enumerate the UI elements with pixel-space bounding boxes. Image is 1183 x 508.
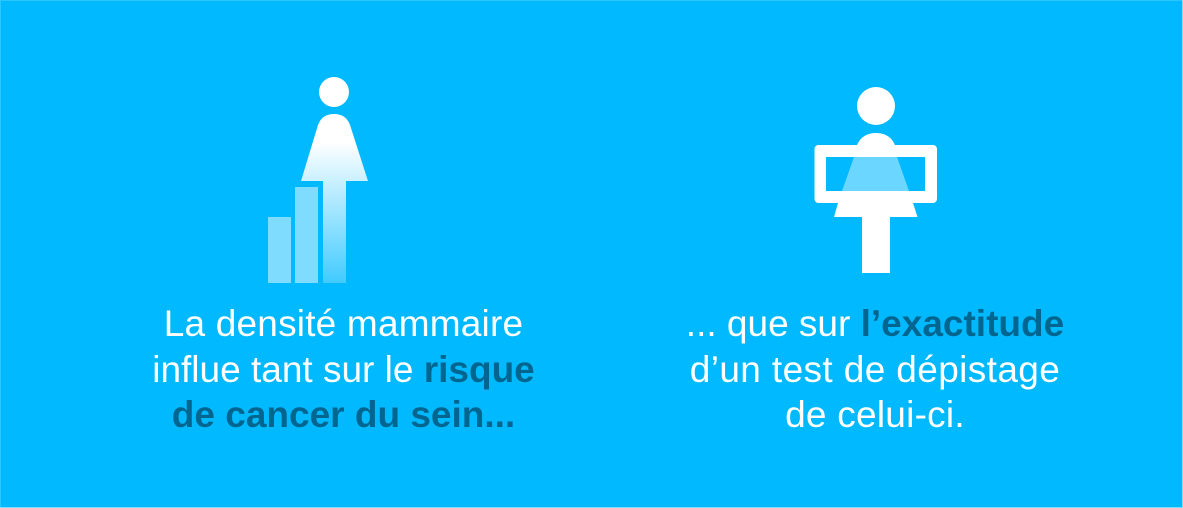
text: screening test accuracy: d’un test de dépistage [690, 348, 1060, 390]
text: breast density and cancer risk: La densité mammaire [164, 303, 523, 344]
text: screening test accuracy: de celui-ci. [785, 394, 965, 435]
text: screening test accuracy: ... que sur l’exactitude [686, 303, 1064, 344]
text: breast density and cancer risk: influe tant sur le risque [152, 348, 535, 390]
text: screening test accuracy [686, 303, 1064, 435]
text: breast density and cancer risk: de cancer du sein... [172, 394, 515, 435]
text: breast density and cancer risk [152, 303, 535, 435]
